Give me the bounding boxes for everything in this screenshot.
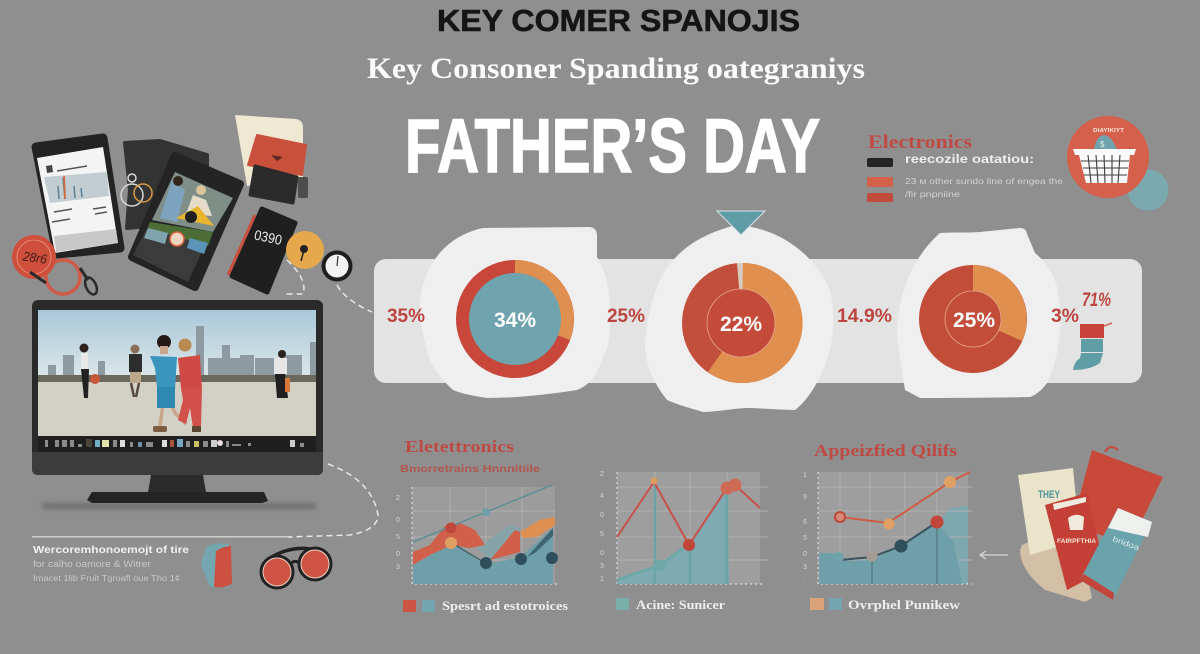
chart 1 plot: 3 [396,564,400,571]
person left [80,344,100,398]
chart 2: line chart [600,471,768,612]
chart 1 legend [403,598,568,613]
icon: paper notebook and wallets [235,115,308,203]
chart 3 plot: 0 [803,551,807,558]
chart 3 legend [810,597,961,612]
text block: lower left note: Wercoremhonoemojt of tire [33,544,189,556]
label 35%: 35% [387,306,425,327]
donut card 2: 22% [720,313,762,336]
icon: phone and pen: 0390 [253,226,284,248]
screen photo [38,310,316,436]
label 71%: 71% [1082,290,1111,311]
chart 1 plot: 0 [396,551,400,558]
chart 3 plot [803,472,972,584]
donut card 1: 34% [494,309,536,332]
label 25%: 25% [607,306,645,327]
chart 1 plot: 0 [396,517,400,524]
heading: Father's Day: FATHER’S DAY [405,104,820,189]
chart 3 plot: 3 [803,564,807,571]
chart 1 legend: Spesrt ad estotroices [442,598,568,613]
keyboard [87,492,268,503]
chart 3 plot: 1 [803,472,807,479]
chart 1 plot [396,485,560,584]
monitor stand [148,475,206,492]
icon: wrapped gift tile [201,543,232,588]
monitor body [32,300,323,475]
icon: gift bags and envelopes: THEY [1038,489,1060,501]
monitor chin [32,452,323,475]
arrow [980,551,1008,559]
icon: stocking [1073,323,1112,370]
panel: spending share band [374,211,1142,412]
taskbar [38,436,316,452]
dashed connectors [283,260,378,537]
icon: shopping basket [1067,116,1168,210]
icon: shopping basket: DIAYIKIYT [1093,128,1124,134]
label 3%: 3% [1051,306,1079,327]
chart 2 plot: 1 [600,576,604,583]
icon: orange badge [286,231,324,269]
text block: lower left note [32,536,288,583]
person middle [129,344,142,397]
subtitle: Key Consoner Spanding oategraniys [367,52,865,85]
chart 2 plot: 5 [600,531,604,538]
icon: gift bags and envelopes: bridoa [1111,534,1141,553]
chart 1 plot: 5 [396,534,400,541]
icon: red seal and ring [12,235,99,296]
donut card 3: 25% [953,309,995,332]
chart 1 subheading: Bmorretrains Hnnnitiile [400,464,541,475]
legend: electronics: /fir pnpniine [905,189,960,199]
chart 2 plot: 4 [600,493,604,500]
icon: teal marker triangle [717,211,765,235]
label 14.9%: 14.9% [837,306,892,327]
donut card 1 [420,227,610,398]
icon: back tablet [125,141,207,228]
icon: phone and pen [228,209,295,292]
chart 2 legend: Acine: Sunicer [636,597,725,612]
icon: tablet with report [36,138,120,254]
chart 2 plot: 0 [600,550,604,557]
chart 1 plot: · [396,576,398,583]
chart 3: appreciated gifts [803,441,972,612]
chart 1: electronics [396,437,568,613]
icon: clock [322,250,352,282]
chart 2 plot [600,471,768,584]
chart 3 plot: 6 [803,519,807,526]
legend: electronics [867,132,1063,202]
icon: sunglasses [260,546,332,590]
text block: lower left note: for calho oamore & Witrer [33,559,151,569]
chart 1 plot: 2 [396,495,400,502]
chart 2 plot: 3 [600,563,604,570]
chart 2 plot: 0 [600,512,604,519]
legend: electronics: Electronics [868,132,972,153]
legend: electronics: 23 м other sundo line of engea the [905,176,1063,186]
chart 3 plot: 5 [803,535,807,542]
boy [150,335,186,432]
chart 3 plot: 9 [803,494,807,501]
monitor shadow [42,503,316,509]
chart 3 legend: Ovrphel Punikew [848,597,961,612]
icon: red seal and ring: 28r6 [21,248,49,267]
icon: shopping basket: $ [1100,140,1105,149]
text block: lower left note: Imacet 1lib Fruit Tgroafl oue Tho 1¢ [33,574,180,583]
chart 3 heading: Appeizfied Qilifs [814,441,957,460]
legend: electronics: reecozile oatatiou: [905,152,1034,166]
donut card 3 [897,228,1060,398]
monitor [32,300,323,509]
icon: gift bags and envelopes [1018,447,1163,602]
person right [274,350,290,398]
chart 3 plot: · [803,576,805,583]
chart 1 heading: Eletettronics [405,437,514,456]
icon: gift bags and envelopes: FAIRPFTHIA [1057,538,1096,545]
title: KEY COMER SPANOJIS [437,3,800,38]
icon: photo tablet [132,156,240,287]
icon: rings [121,174,152,206]
chart 2 plot: 2 [600,471,604,478]
device collage [12,115,352,296]
girl [178,338,202,432]
donut card 2 [645,225,833,412]
